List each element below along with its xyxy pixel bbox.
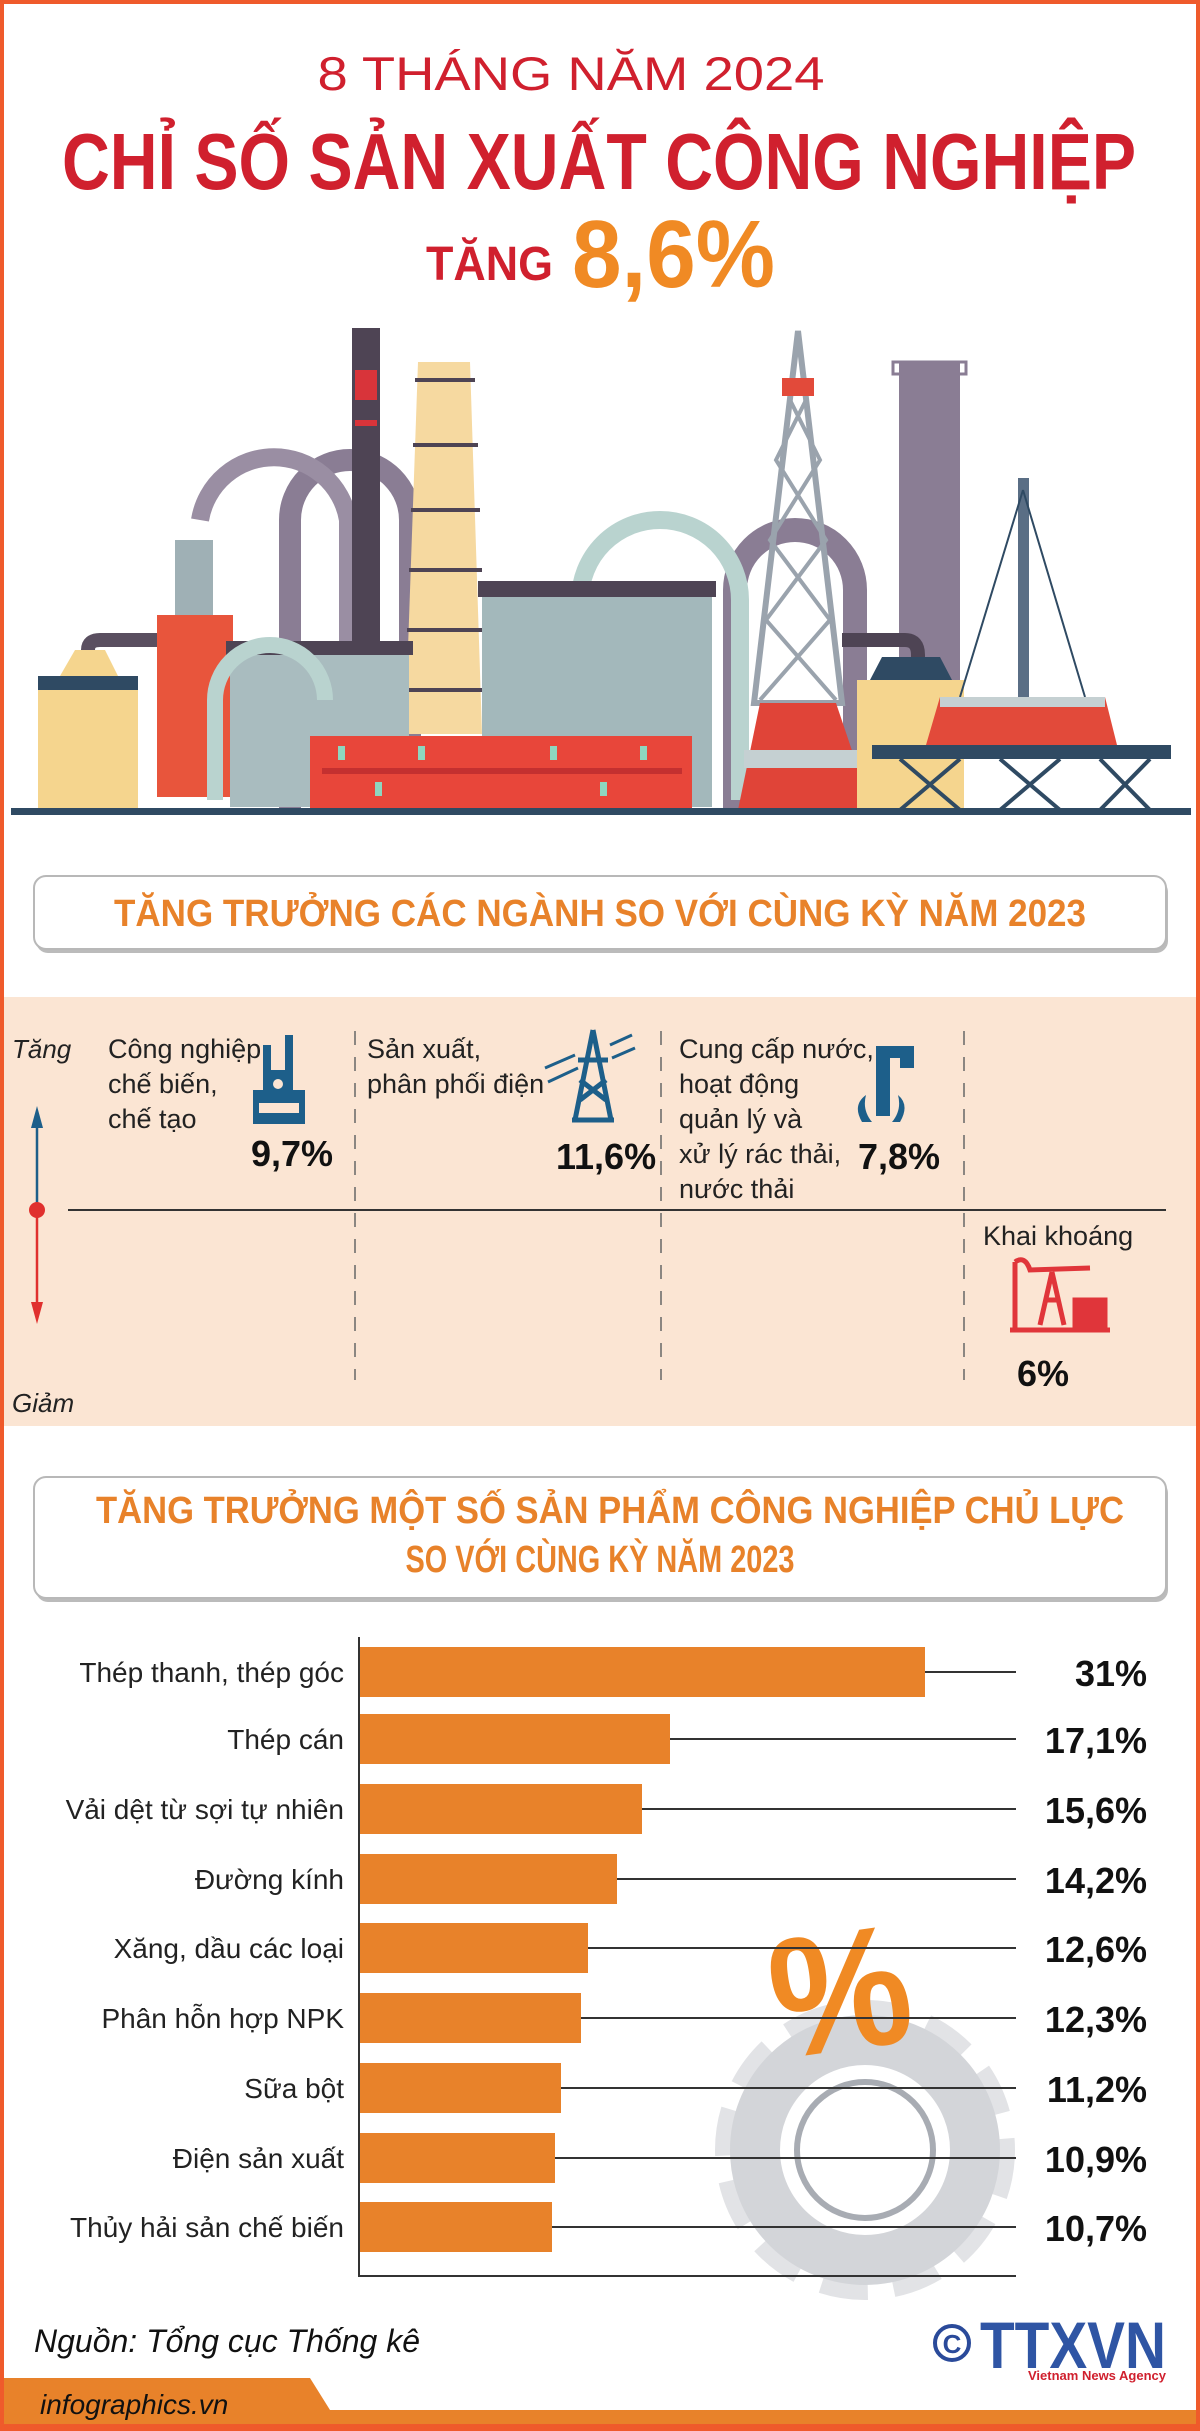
subtitle: 8 THÁNG NĂM 2024 xyxy=(318,47,824,100)
bar: NPK xyxy=(101,1993,1147,2043)
item: mining: 6% xyxy=(1017,1353,1069,1394)
bar: Xăng dầu xyxy=(114,1923,1147,1973)
item: electricity xyxy=(367,1030,656,1177)
item: electricity: 11,6% xyxy=(556,1136,656,1177)
bar: Vải dệt: 15,6% xyxy=(1045,1790,1147,1831)
item: mining: Khai khoáng xyxy=(983,1221,1133,1251)
footer band: infographics.vn xyxy=(40,2389,228,2420)
axis line xyxy=(68,1209,1166,1211)
bar: Sữa bột: Sữa bột xyxy=(244,2073,344,2104)
cream chimney xyxy=(405,362,482,734)
left tank xyxy=(230,641,409,807)
growth headline: TĂNG xyxy=(426,237,553,291)
bar: Đường kính xyxy=(195,1854,1147,1904)
item: water supply: hoạt động xyxy=(679,1069,799,1099)
icon: power tower xyxy=(545,1030,635,1120)
logo: TTXVN: C xyxy=(943,2329,962,2359)
logo: TTXVN: Vietnam News Agency xyxy=(1028,2368,1167,2383)
lattice tower xyxy=(754,331,842,703)
bar: Thủy hải sản: Thủy hải sản chế biến xyxy=(70,2212,344,2243)
item: processing: chế tạo xyxy=(108,1104,197,1134)
item: electricity: Sản xuất, xyxy=(367,1034,481,1064)
bar: Xăng dầu: 12,6% xyxy=(1045,1929,1147,1970)
bar: Thép cán xyxy=(227,1714,1147,1764)
label: Giảm: Giảm xyxy=(12,1388,74,1418)
logo: TTXVN: TTXVN xyxy=(980,2308,1166,2382)
item: water supply: 7,8% xyxy=(858,1136,940,1177)
bar: Đường kính: Đường kính xyxy=(195,1864,344,1895)
right yellow tank xyxy=(857,680,964,810)
growth headline xyxy=(426,201,775,308)
left pipe xyxy=(88,640,157,680)
header: sector growth xyxy=(34,876,1168,953)
item: processing: 9,7% xyxy=(251,1133,333,1174)
bar: Sữa bột: 11,2% xyxy=(1047,2069,1147,2110)
item: water supply: xử lý rác thải, xyxy=(679,1139,841,1169)
item: water supply: Cung cấp nước, xyxy=(679,1034,874,1064)
item: water supply: quản lý và xyxy=(679,1104,803,1134)
growth headline: 8,6% xyxy=(572,201,775,308)
dark chimney xyxy=(352,328,380,641)
bar chart xyxy=(66,1637,1147,2277)
bar: Điện sản xuất xyxy=(173,2133,1147,2183)
item: processing: chế biến, xyxy=(108,1069,218,1099)
item: electricity: phân phối điện xyxy=(367,1069,544,1099)
bar: Sữa bột xyxy=(244,2063,1147,2113)
bar: Điện sản xuất: 10,9% xyxy=(1045,2139,1147,2180)
item: water supply xyxy=(679,1034,940,1204)
right mast xyxy=(1018,478,1029,697)
central tank xyxy=(482,581,712,807)
header: key products xyxy=(34,1477,1168,1602)
right pipe xyxy=(842,640,918,665)
title block xyxy=(62,47,1136,308)
icon: factory xyxy=(253,1035,305,1124)
bar: NPK: Phân hỗn hợp NPK xyxy=(101,2003,344,2034)
bar: Thép thanh, thép góc: 31% xyxy=(1075,1653,1147,1694)
bar: NPK: 12,3% xyxy=(1045,1999,1147,2040)
panel: sector growth xyxy=(4,997,1196,1426)
footer band xyxy=(0,2378,1200,2431)
header: key products: SO VỚI CÙNG KỲ NĂM 2023 xyxy=(406,1537,794,1581)
gear with percent: % xyxy=(758,1888,923,2096)
factory illustration xyxy=(11,328,1191,815)
icon: tap xyxy=(858,1046,914,1122)
ground line xyxy=(11,808,1191,815)
left yellow tank xyxy=(38,676,138,810)
bar: Vải dệt: Vải dệt từ sợi tự nhiên xyxy=(66,1794,344,1825)
background towers xyxy=(899,362,960,810)
source note: Nguồn: Tổng cục Thống kê xyxy=(34,2323,420,2359)
teal arches xyxy=(215,645,325,800)
up/down arrow xyxy=(29,1106,45,1324)
red building xyxy=(310,736,692,810)
bar: Thủy hải sản: 10,7% xyxy=(1045,2208,1147,2249)
bar: Điện sản xuất: Điện sản xuất xyxy=(173,2143,344,2174)
label: Tăng: Tăng xyxy=(12,1034,72,1064)
orange block left xyxy=(157,615,233,797)
item: mining xyxy=(983,1221,1133,1394)
bar: Đường kính: 14,2% xyxy=(1045,1860,1147,1901)
header: key products: TĂNG TRƯỞNG MỘT SỐ SẢN PHẨM CÔNG NGHIỆP CHỦ LỰC xyxy=(96,1487,1124,1532)
item: processing: Công nghiệp xyxy=(108,1034,261,1064)
right platform xyxy=(926,697,1117,745)
bar: Vải dệt xyxy=(66,1784,1147,1834)
header: sector growth: TĂNG TRƯỞNG CÁC NGÀNH SO VỚI CÙNG KỲ NĂM 2023 xyxy=(114,891,1086,935)
item: processing xyxy=(108,1034,333,1174)
bar: Thủy hải sản xyxy=(70,2202,1147,2252)
bar: Thép cán: 17,1% xyxy=(1045,1720,1147,1761)
gear with percent xyxy=(745,1888,985,2270)
bar: Thép thanh, thép góc xyxy=(79,1647,1147,1697)
bar: Thép cán: Thép cán xyxy=(227,1724,344,1755)
icon: oil pump xyxy=(1010,1260,1110,1330)
bar: Thép thanh, thép góc: Thép thanh, thép góc xyxy=(79,1657,344,1688)
item: water supply: nước thải xyxy=(679,1174,794,1204)
bar: Xăng dầu: Xăng, dầu các loại xyxy=(114,1933,344,1964)
